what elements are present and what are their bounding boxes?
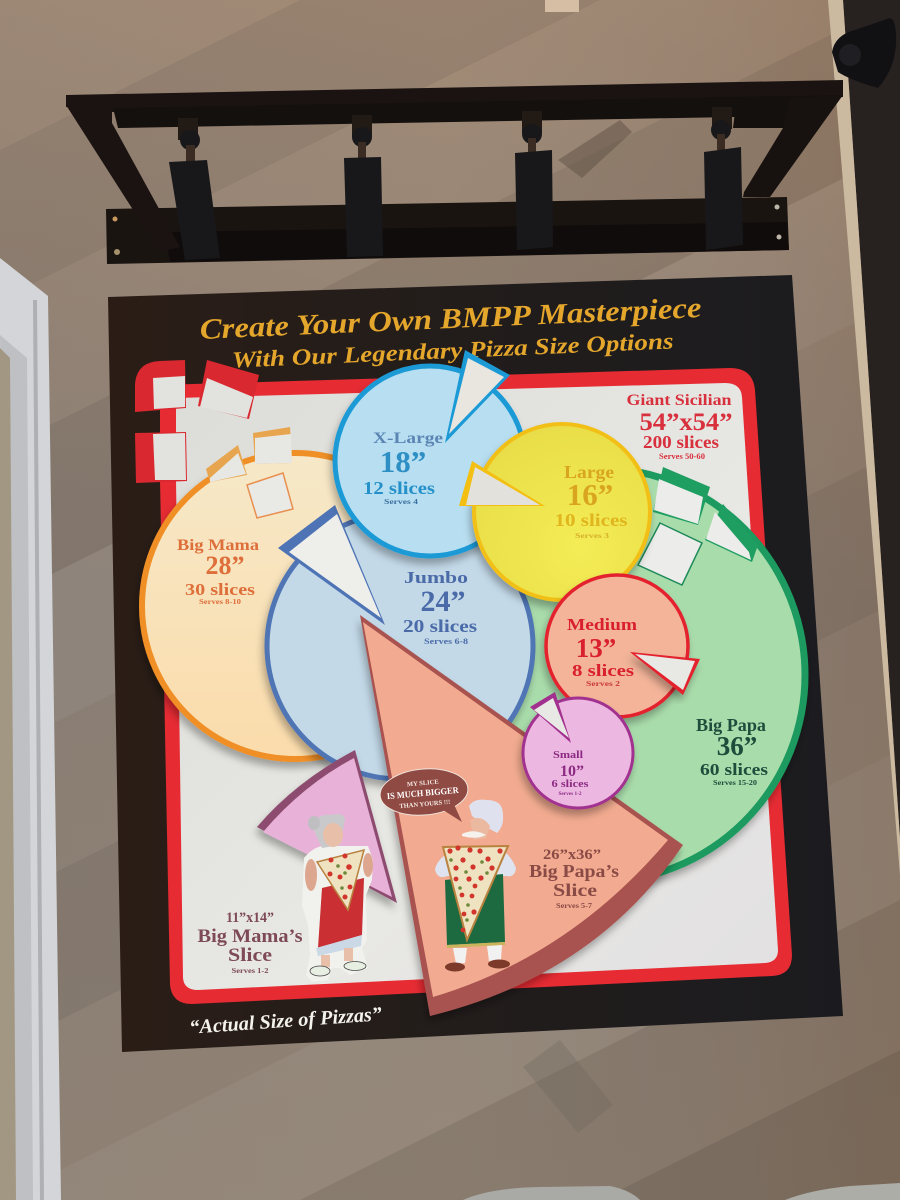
track light 4 [704, 107, 743, 250]
circle: Medium 13 inch [546, 575, 688, 717]
title: Create Your Own BMPP Masterpiece [199, 292, 702, 346]
Big Mama's slice label [198, 910, 302, 975]
Small cutout slice [530, 692, 571, 743]
Big Mama's slice label: 11”x14” [226, 910, 274, 926]
Big Papa's slice [360, 615, 683, 1016]
circle: Big Mama 28 inch [142, 453, 448, 759]
circle: Large 16 inch [474, 424, 650, 600]
Big Papa label: Serves 15-20 [713, 778, 757, 787]
Medium label: Serves 2 [586, 679, 620, 688]
Medium label: Medium [567, 615, 637, 634]
speech bubble: MY SLICE [407, 779, 439, 788]
red corner tabs [135, 360, 259, 483]
X-Large label: Serves 4 [384, 497, 418, 506]
Big Papa label: 60 slices [700, 760, 768, 779]
Big Mama label: Serves 8-10 [199, 597, 241, 606]
Big Mama's slice [257, 750, 397, 903]
Giant Sicilian label: Giant Sicilian [626, 392, 732, 409]
Small label: 10” [560, 763, 584, 780]
X-Large cutout slice [445, 350, 510, 443]
track lighting fixture [66, 80, 843, 264]
chef Big Mama cutout holding pizza [302, 814, 373, 982]
X-Large label: 12 slices [363, 478, 435, 498]
Small label: Small [553, 750, 583, 761]
Medium label: 13” [576, 633, 616, 663]
orange corner tabs [206, 427, 293, 518]
Jumbo cutout slice [278, 505, 385, 625]
Big Mama's slice label: Big Mama’s [198, 926, 302, 947]
Big Mama label [177, 537, 259, 606]
Big Mama label: 30 slices [185, 580, 255, 599]
speech bubble: THAN YOURS !!! [399, 799, 451, 810]
security camera [832, 18, 896, 88]
main black board [108, 275, 843, 1052]
Giant Sicilian label [626, 392, 732, 461]
Big Mama's slice label: Slice [228, 945, 272, 966]
Giant Sicilian label: 54”x54” [640, 409, 732, 436]
Big Papa's slice label: Big Papa’s [529, 861, 619, 881]
Big Papa's slice label: 26”x36” [543, 847, 601, 863]
Large label: Large [564, 462, 614, 482]
Small label: Serves 1-2 [558, 792, 582, 797]
Small label [552, 750, 588, 797]
bottom edge objects [463, 1183, 900, 1200]
Big Papa label [696, 715, 768, 787]
Large label [554, 462, 628, 540]
Big Mama label: Big Mama [177, 537, 259, 554]
Big Mama label: 28” [206, 551, 244, 580]
title [199, 292, 702, 373]
circle: Jumbo 24 inch [267, 513, 533, 779]
circle: Small 10 inch [523, 698, 633, 808]
Medium label [567, 615, 637, 688]
chef Big Papa holding pizza [435, 800, 516, 972]
speech bubble: IS MUCH BIGGER [386, 785, 459, 801]
panel: Giant Sicilian red-bordered sheet [160, 368, 792, 1004]
Big Papa's slice label: Slice [553, 880, 597, 900]
Giant Sicilian label: 200 slices [643, 432, 719, 452]
Large label: Serves 3 [575, 531, 609, 540]
Jumbo label [403, 568, 477, 646]
Jumbo label: 24” [420, 585, 466, 618]
Big Papa label: 36” [717, 731, 757, 761]
Large label: 10 slices [554, 510, 628, 530]
X-Large label: X-Large [373, 430, 443, 447]
circle: X-Large 18 inch [335, 366, 525, 556]
Large cutout slice [459, 461, 545, 506]
title: With Our Legendary Pizza Size Options [231, 328, 674, 373]
Medium cutout slice [630, 652, 700, 695]
Big Papa's slice label: Serves 5-7 [556, 901, 592, 910]
track light 1 [169, 118, 220, 260]
Small label: 6 slices [552, 779, 588, 790]
X-Large label: 18” [380, 444, 426, 479]
Jumbo label: Jumbo [404, 568, 468, 587]
track light 3 [515, 111, 553, 250]
Big Papa label: Big Papa [696, 715, 766, 735]
left door frame [0, 258, 61, 1200]
green corner tabs [638, 467, 758, 585]
right wall trim and dark wall [828, 0, 900, 875]
Jumbo label: 20 slices [403, 616, 477, 636]
track light 2 [344, 115, 383, 257]
Giant Sicilian label: Serves 50-60 [659, 452, 705, 461]
circle: Big Papa 36 inch [391, 468, 805, 882]
footnote: actual size of pizzas: “Actual Size of Pizzas” [189, 1003, 383, 1039]
Big Papa's slice label [529, 847, 619, 910]
Large label: 16” [567, 477, 613, 512]
wall tag [545, 0, 579, 12]
Medium label: 8 slices [572, 661, 634, 680]
Jumbo label: Serves 6-8 [424, 637, 468, 646]
Big Mama's slice label: Serves 1-2 [232, 966, 269, 975]
speech bubble [378, 765, 470, 822]
X-Large label [363, 430, 443, 506]
